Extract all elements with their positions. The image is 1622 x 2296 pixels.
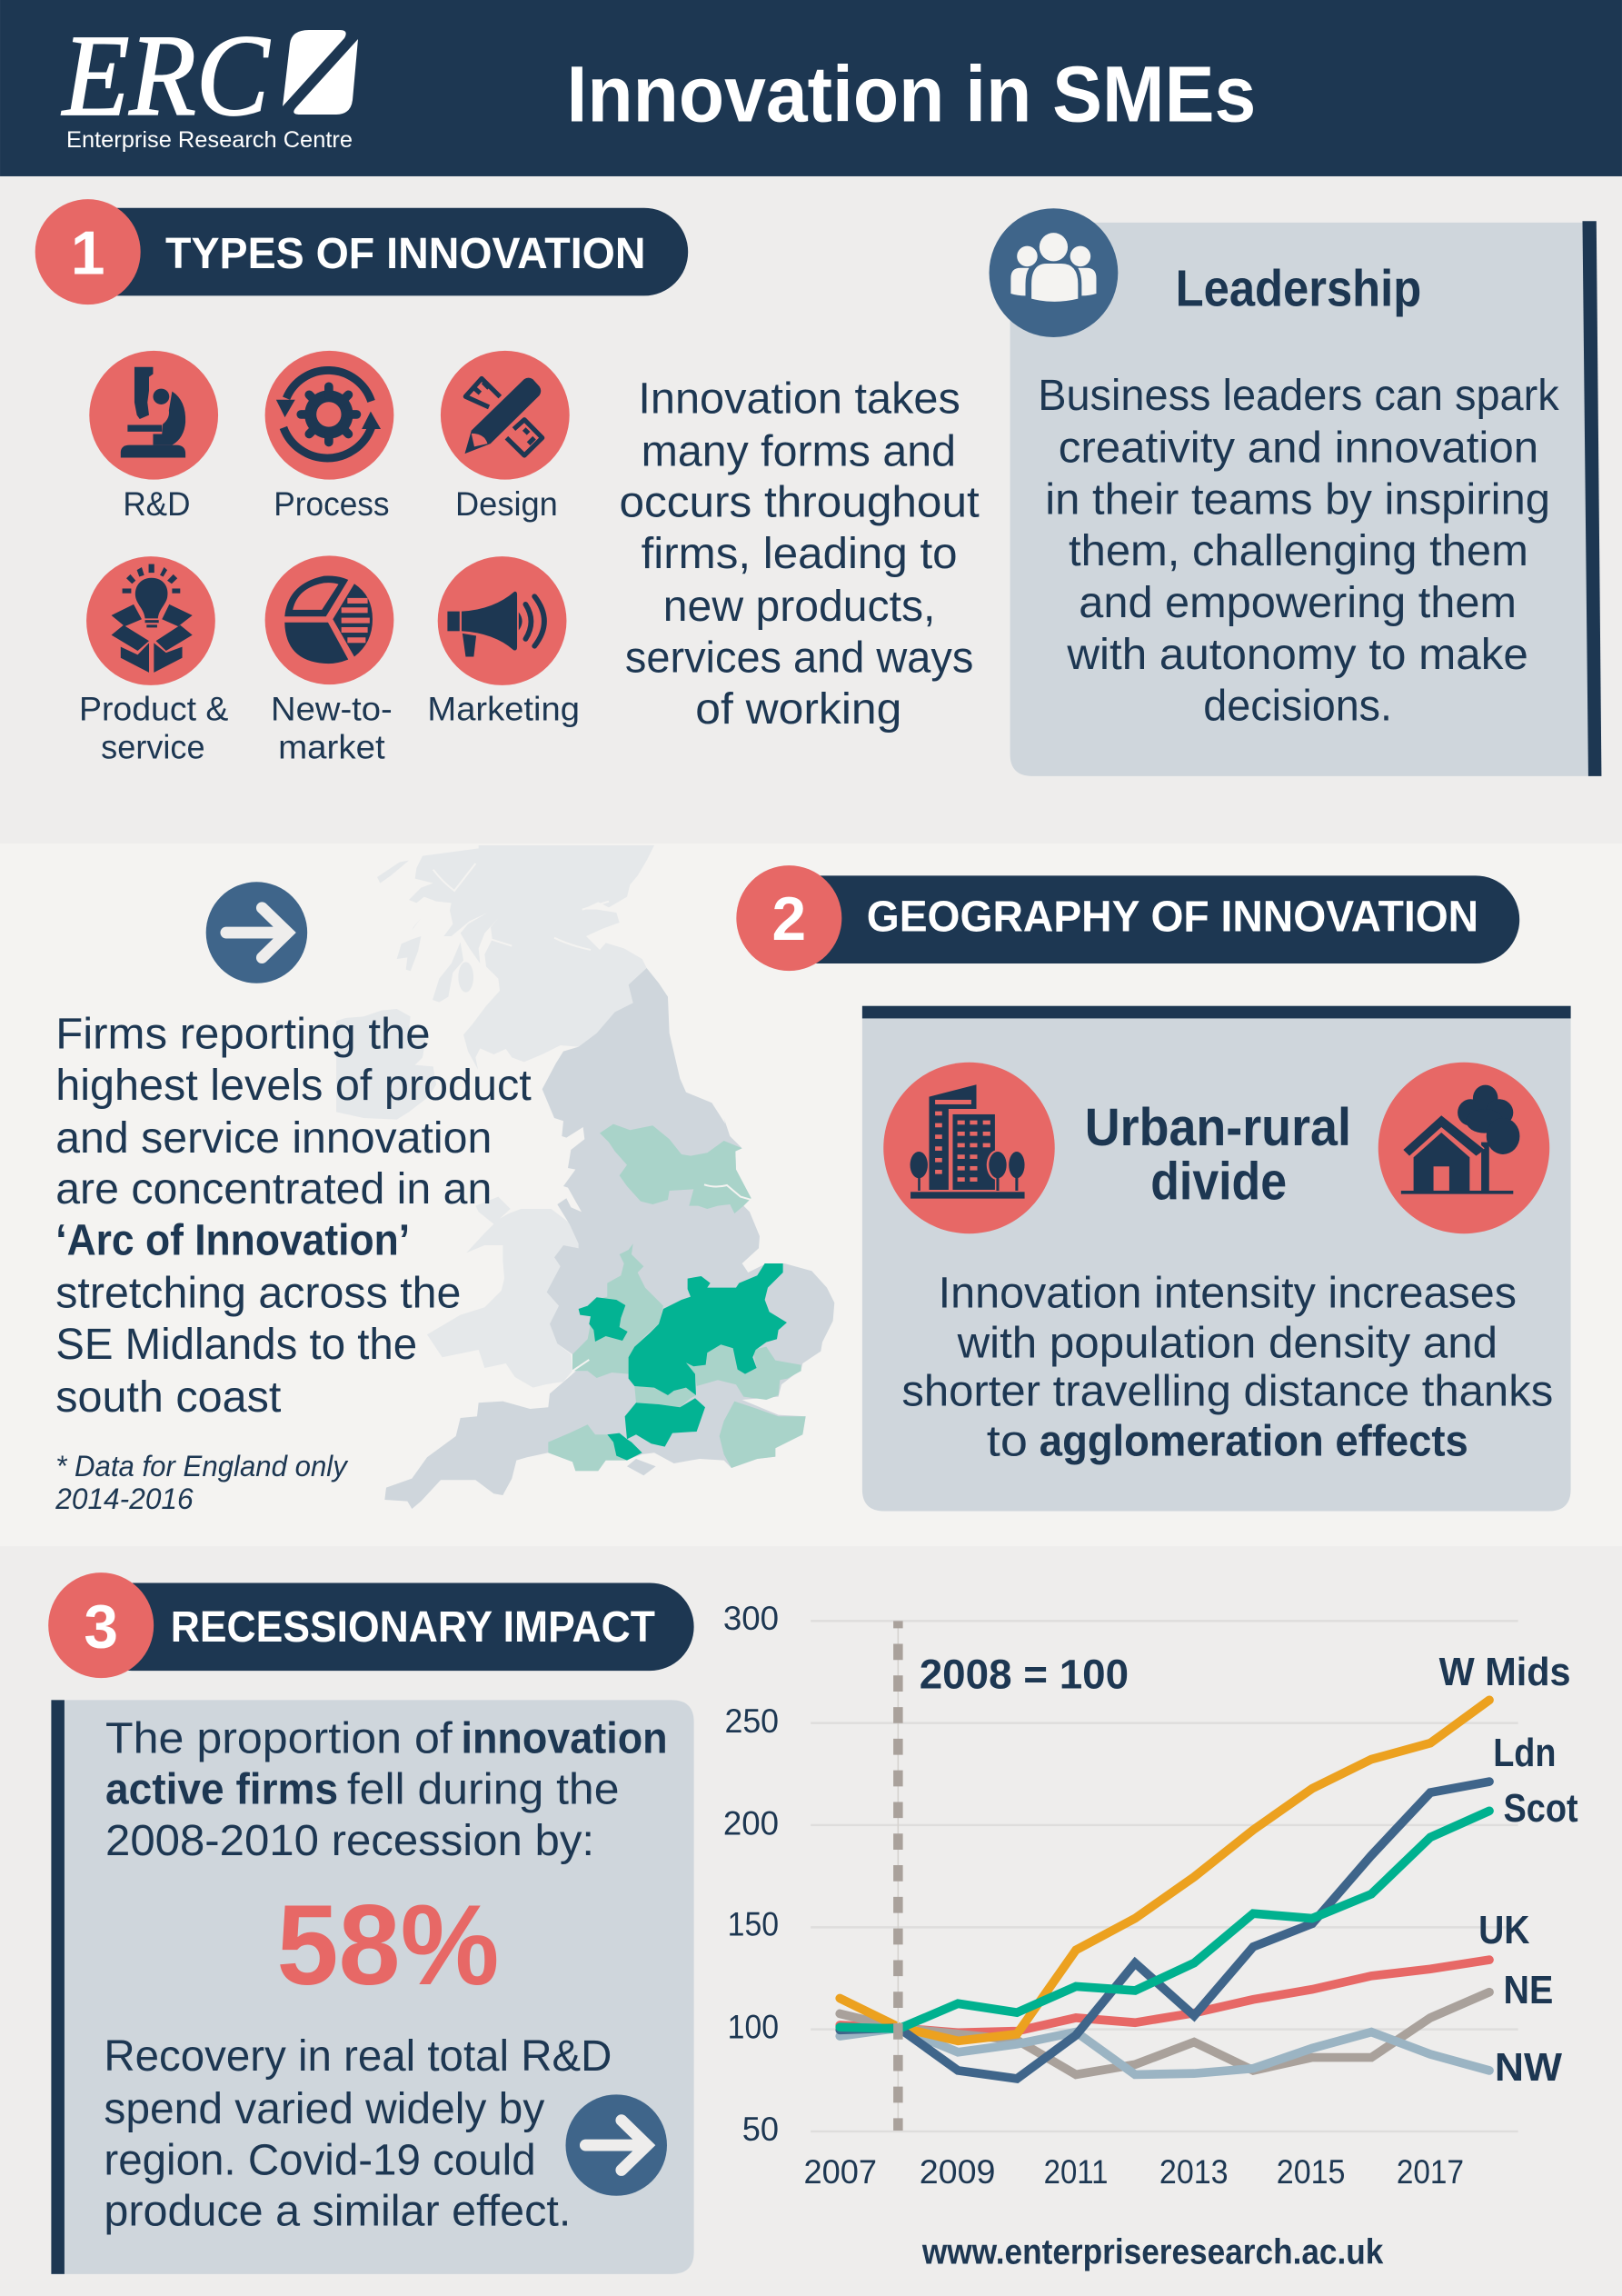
- text: innovation takes many forms: new products,: [663, 582, 935, 631]
- text: innovation intensity: Innovation intensity increases: [939, 1269, 1517, 1318]
- annotation: 2008 = 100: 2008 = 100: [920, 1651, 1129, 1697]
- icon: arrow pointing to chart: [566, 2094, 667, 2196]
- line chart: regional R&D spend index: [723, 1599, 1578, 2191]
- x axis labels: 2015: [1277, 2152, 1346, 2191]
- section 1 heading: TYPES OF INNOVATION: [165, 229, 645, 278]
- text: recovery in R&D spend: produce a similar effect.: [104, 2187, 571, 2236]
- text: proportion of innovation active firms: [105, 1713, 668, 1865]
- icon: new-to-market pie chart: New-to-: [271, 690, 393, 728]
- series labels: W Mids: [1439, 1651, 1571, 1694]
- section 3 heading: [48, 1572, 694, 1678]
- text: innovation takes many forms: Innovation takes: [638, 374, 960, 423]
- text: recovery in R&D spend: Recovery in real total R&D: [104, 2031, 612, 2081]
- map: England and Wales: [384, 968, 834, 1509]
- y axis labels: 150: [728, 1905, 779, 1943]
- text: innovation takes many forms: services and ways: [625, 633, 973, 682]
- panel: leadership: [990, 208, 1601, 776]
- ERC logo: Enterprise Research Centre: [66, 127, 353, 153]
- icon: rural house and tree: [1378, 1063, 1549, 1233]
- icon: new-to-market pie chart: market: [278, 727, 385, 765]
- text: arc of innovation: highest levels of product: [55, 1061, 532, 1110]
- x axis labels: 2013: [1159, 2152, 1229, 2191]
- ERC logo: [61, 11, 358, 153]
- text: proportion of innovation active firms: fell during the: [347, 1765, 619, 1814]
- ERC logo: ERC: [61, 11, 271, 140]
- text: arc of innovation: stretching across the: [55, 1269, 461, 1318]
- heading: leadership: Leadership: [1176, 260, 1421, 317]
- section 2 heading: GEOGRAPHY OF INNOVATION: [867, 893, 1478, 942]
- icon: process gear: [265, 351, 393, 523]
- icon: marketing megaphone: Marketing: [427, 690, 580, 728]
- icon: new-to-market pie chart: [265, 555, 393, 765]
- icon: R&D microscope: R&D: [123, 484, 190, 523]
- text: innovation intensity: agglomeration effects: [1040, 1416, 1468, 1465]
- y axis labels: 50: [742, 2110, 779, 2148]
- text: innovation takes many forms: occurs throughout: [619, 478, 980, 527]
- text: innovation takes many forms: many forms and: [642, 426, 956, 475]
- statistic: 58%: 58%: [276, 1881, 499, 2009]
- y axis labels: 250: [724, 1702, 779, 1740]
- section 3 heading: 3: [84, 1592, 118, 1661]
- text: innovation intensity: to: [987, 1416, 1028, 1465]
- map: Great Britain with Arc of Innovation regions: [336, 845, 834, 1509]
- map: Wales: [427, 1197, 580, 1388]
- text: innovation intensity: with population density and: [957, 1318, 1498, 1367]
- icon: design pencil and ruler: Design: [455, 484, 558, 523]
- text: proportion of innovation active firms: 2008-2010 recession by:: [105, 1816, 594, 1865]
- heading: urban-rural divide: [1085, 1099, 1351, 1211]
- series labels: NW: [1495, 2046, 1562, 2090]
- series lines: [840, 1700, 1489, 2079]
- footnote: data for England only: 2014-2016: [55, 1482, 194, 1515]
- icon: arrow pointing to map: [206, 882, 307, 983]
- icon: marketing megaphone: [427, 556, 580, 728]
- series labels: NE: [1503, 1969, 1553, 2012]
- x axis labels: 2007: [803, 2152, 877, 2191]
- heading: urban-rural divide: Urban-rural: [1085, 1099, 1351, 1157]
- header banner: [0, 0, 1622, 176]
- text: leadership body: [1038, 371, 1560, 731]
- text: arc of innovation: ‘Arc of Innovation’: [55, 1216, 410, 1265]
- x axis labels: 2011: [1044, 2152, 1109, 2191]
- section 1 heading: 1: [71, 219, 105, 287]
- icon: product and service box: service: [101, 727, 205, 765]
- y axis labels: [723, 1599, 779, 2148]
- text: innovation intensity: [901, 1269, 1553, 1465]
- series labels: Ldn: [1493, 1732, 1556, 1775]
- y axis labels: 100: [728, 2007, 779, 2045]
- text: leadership body: creativity and innovation: [1059, 423, 1538, 472]
- y axis labels: 200: [723, 1804, 779, 1842]
- text: recovery in R&D spend: [104, 2031, 612, 2236]
- icon: people: [990, 208, 1118, 337]
- website url: www.enterpriseresearch.ac.uk: [921, 2233, 1384, 2272]
- icon: R&D microscope: [89, 351, 218, 523]
- series labels: Scot: [1503, 1787, 1578, 1831]
- text: innovation takes many forms: [619, 374, 980, 734]
- text: arc of innovation: SE Midlands to the: [55, 1320, 417, 1369]
- icon: product and service box: [79, 556, 229, 765]
- icon: process gear: Process: [274, 484, 390, 523]
- icon: city buildings: [883, 1063, 1055, 1233]
- text: leadership body: Business leaders can spark: [1038, 371, 1560, 420]
- panel: innovation type icons: [79, 351, 580, 765]
- text: arc of innovation: south coast: [55, 1373, 282, 1422]
- heading: urban-rural divide: divide: [1150, 1153, 1287, 1211]
- text: recovery in R&D spend: spend varied widely by: [104, 2084, 545, 2133]
- x axis labels: 2017: [1397, 2152, 1464, 2191]
- map: Scotland and Northern Ireland: [336, 845, 654, 1120]
- title: Innovation in SMEs: [566, 51, 1256, 139]
- text: recovery in R&D spend: region. Covid-19 could: [104, 2135, 536, 2184]
- text: leadership body: in their teams by inspiring: [1045, 474, 1550, 524]
- text: innovation intensity: shorter travelling distance thanks: [901, 1367, 1553, 1416]
- footnote: data for England only: * Data for England only: [55, 1450, 349, 1482]
- section 2 heading: [736, 865, 1519, 971]
- panel: recessionary impact: [51, 1700, 694, 2274]
- series labels: [1439, 1651, 1578, 2090]
- text: proportion of innovation active firms: active firms: [105, 1765, 338, 1814]
- icon: product and service box: Product &: [79, 690, 229, 728]
- 2008 baseline marker: [897, 1621, 899, 2131]
- text: proportion of innovation active firms: innovation: [461, 1713, 668, 1762]
- text: arc of innovation: Firms reporting the: [55, 1009, 431, 1058]
- text: innovation takes many forms: of working: [695, 684, 901, 734]
- footnote: data for England only: [55, 1450, 349, 1515]
- text: arc of innovation: [55, 1009, 532, 1422]
- section 3 heading: RECESSIONARY IMPACT: [171, 1602, 655, 1652]
- x axis labels: [803, 2152, 1464, 2191]
- panel: urban-rural divide: [862, 1006, 1571, 1512]
- section 2 heading: 2: [772, 885, 806, 953]
- text: arc of innovation: are concentrated in an: [55, 1164, 492, 1213]
- text: leadership body: them, challenging them: [1069, 526, 1528, 575]
- text: arc of innovation: and service innovation: [55, 1113, 492, 1163]
- text: innovation takes many forms: firms, leading to: [642, 529, 958, 578]
- text: leadership body: decisions.: [1203, 682, 1392, 731]
- text: proportion of innovation active firms: The proportion of: [105, 1713, 453, 1762]
- y axis labels: 300: [723, 1599, 779, 1637]
- text: leadership body: and empowering them: [1079, 578, 1517, 627]
- section 1 heading: [35, 199, 688, 304]
- series labels: UK: [1478, 1909, 1529, 1952]
- icon: design pencil and ruler: [441, 351, 570, 523]
- text: leadership body: with autonomy to make: [1066, 630, 1528, 679]
- x axis labels: 2009: [920, 2152, 995, 2191]
